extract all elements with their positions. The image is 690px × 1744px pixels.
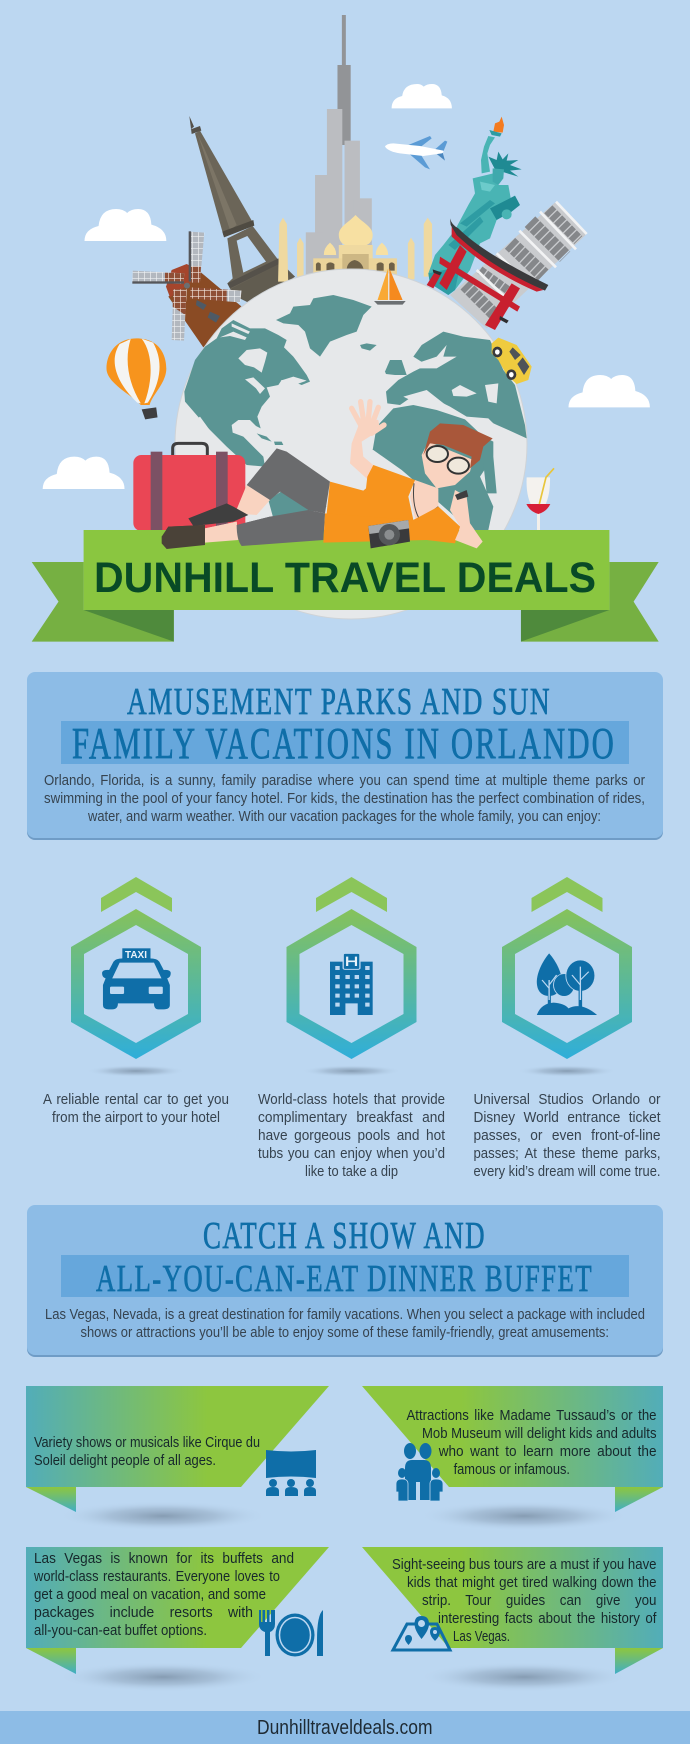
text: Las Vegas.: [453, 1629, 510, 1645]
text: strip. Tour guides can give you: [422, 1593, 656, 1609]
panel: Las Vegas intro: [27, 1205, 663, 1357]
globe with continents: [175, 269, 527, 619]
icon: sailboat: [374, 268, 406, 305]
icon: camera: [368, 520, 410, 548]
icon: Burj Khalifa skyscraper: [306, 15, 372, 276]
icon: cloud top right: [392, 84, 452, 108]
continents: [184, 295, 527, 530]
figure elements in front of ribbon: [162, 507, 483, 549]
text: Sight-seeing bus tours are a must if you have: [392, 1557, 656, 1573]
caption: passes, or even front-of-line: [474, 1128, 660, 1144]
intro paragraph: [44, 773, 645, 825]
icon: Taj Mahal: [278, 215, 432, 282]
icon: cloud right: [568, 375, 650, 407]
icon: hotel: [330, 953, 373, 1015]
ribbon fold: [615, 1648, 663, 1674]
chevron: [101, 877, 172, 912]
ribbon fold: [26, 1648, 76, 1674]
ribbon: [26, 1547, 329, 1648]
text: famous or infamous.: [454, 1462, 570, 1478]
caption: Disney World entrance ticket: [474, 1110, 660, 1126]
text: who want to learn more about the: [438, 1444, 656, 1460]
icon: trees: [537, 953, 597, 1015]
footer bar: [0, 1711, 690, 1744]
caption: World-class hotels that provide: [258, 1092, 445, 1108]
taxi sign text: TAXI: [125, 950, 147, 961]
icon: cloud left: [84, 209, 166, 241]
footer background: [0, 1711, 690, 1744]
caption: every kid’s dream will come true.: [474, 1164, 660, 1180]
text: Mob Museum will delight kids and adults: [422, 1426, 656, 1442]
ribbon fold: [615, 1487, 663, 1512]
text: [406, 1408, 656, 1478]
text: [34, 1435, 260, 1469]
globe disc: [175, 269, 527, 619]
text: all-you-can-eat buffet options.: [34, 1623, 207, 1639]
icon: taxi car on globe edge: [492, 338, 532, 384]
heading line 1: CATCH A SHOW AND: [203, 1215, 486, 1257]
text: [33, 1551, 294, 1639]
icon: hot air balloon: [106, 338, 166, 419]
shadow: [517, 1065, 617, 1077]
shadow: [58, 1501, 268, 1531]
caption: Universal Studios Orlando or: [474, 1092, 661, 1108]
ribbon tails: [32, 530, 659, 642]
panel background: [27, 672, 663, 840]
panel background: [27, 1205, 663, 1357]
icon: windmill: [132, 231, 242, 347]
intro paragraph: shows or attractions you’ll be able to enjoy some of these family-friendly, great amusements:: [80, 1325, 609, 1341]
intro paragraph: Orlando, Florida, is a sunny, family paradise where you can spend time at multiple theme parks or: [44, 773, 645, 789]
icon: cloud lower left: [43, 457, 125, 489]
card: bus tours: [362, 1547, 663, 1692]
ribbon: [362, 1547, 663, 1648]
caption: complimentary breakfast and: [258, 1110, 445, 1126]
intro paragraph: swimming in the pool of your fancy hotel. For kids, the destination has the perfect combination of rides,: [44, 791, 645, 807]
seas and lakes on globe: [198, 323, 508, 435]
caption: passes; At these theme parks,: [474, 1146, 660, 1162]
caption: tubs you can enjoy when you’d: [258, 1146, 445, 1162]
text: Soleil delight people of all ages.: [34, 1453, 216, 1469]
text: [392, 1557, 657, 1645]
icon: cocktail glass: [526, 468, 554, 532]
hexagon frame: [286, 909, 416, 1059]
text: Attractions like Madame Tussaud’s or the: [406, 1408, 656, 1424]
caption: [43, 1092, 229, 1126]
caption: A reliable rental car to get you: [43, 1092, 229, 1108]
header illustration: foreground items: [43, 84, 650, 489]
shadow: [86, 1065, 186, 1077]
title ribbon: [32, 507, 659, 642]
hexagon frame: [71, 909, 201, 1059]
text: Variety shows or musicals like Cirque du: [34, 1435, 260, 1451]
icon: torii gate: [427, 218, 548, 330]
ribbon: [26, 1386, 329, 1487]
ribbon: [362, 1386, 663, 1487]
hexagon frame: [502, 909, 632, 1059]
traveller figure with suitcase, camera and drink: [133, 402, 554, 549]
icon: airplane: [385, 136, 447, 169]
intro paragraph: water, and warm weather. With our vacation packages for the whole family, you can enjoy:: [87, 809, 601, 825]
right landmarks and airplane: [385, 117, 587, 330]
intro paragraph: [45, 1307, 645, 1341]
caption: [258, 1092, 445, 1180]
text: world-class restaurants. Everyone loves to: [33, 1569, 280, 1585]
traveller figure: [162, 402, 493, 549]
text: kids that might get tired walking down the: [407, 1575, 656, 1591]
shadow: [419, 1501, 629, 1531]
footer website text: Dunhilltraveldeals.com: [257, 1717, 432, 1739]
card: variety shows: [26, 1386, 329, 1531]
card: buffets: [26, 1547, 329, 1692]
text: get a good meal on vacation, and some: [34, 1587, 266, 1603]
left landmarks: Eiffel tower and windmill: [132, 116, 295, 347]
icon: Statue of Liberty: [428, 117, 522, 295]
icon: suitcase: [133, 443, 245, 531]
center landmarks: [278, 15, 432, 282]
text: packages include resorts with: [34, 1605, 253, 1621]
icon: plate with fork and knife: [259, 1610, 323, 1656]
caption: like to take a dip: [305, 1164, 398, 1180]
icon: family: [396, 1443, 443, 1501]
text: interesting facts about the history of: [438, 1611, 657, 1627]
feature: hotels: [258, 877, 445, 1180]
icon: leaning tower of Pisa: [450, 202, 587, 328]
card: attractions: [362, 1386, 663, 1531]
chevron: [316, 877, 387, 912]
icon: theater screen and audience: [266, 1450, 316, 1496]
shadow: [58, 1662, 268, 1692]
caption: from the airport to your hotel: [52, 1110, 220, 1126]
feature: theme parks: [474, 877, 661, 1180]
caption: [474, 1092, 661, 1180]
feature: rental car: [43, 877, 229, 1126]
panel: amusement parks intro: [27, 672, 663, 840]
caption: have gorgeous pools and hot: [258, 1128, 445, 1144]
chevron: [532, 877, 602, 912]
ribbon fold: [26, 1487, 76, 1512]
icon: taxi: [102, 948, 171, 1009]
shadow: [302, 1065, 402, 1077]
title: Dunhill Travel Deals: DUNHILL TRAVEL DEALS: [94, 554, 596, 602]
icon: map with location pins: [393, 1616, 450, 1650]
icon: Eiffel tower: [189, 116, 295, 303]
text: Las Vegas is known for its buffets and: [34, 1551, 294, 1567]
shadow: [419, 1662, 629, 1692]
